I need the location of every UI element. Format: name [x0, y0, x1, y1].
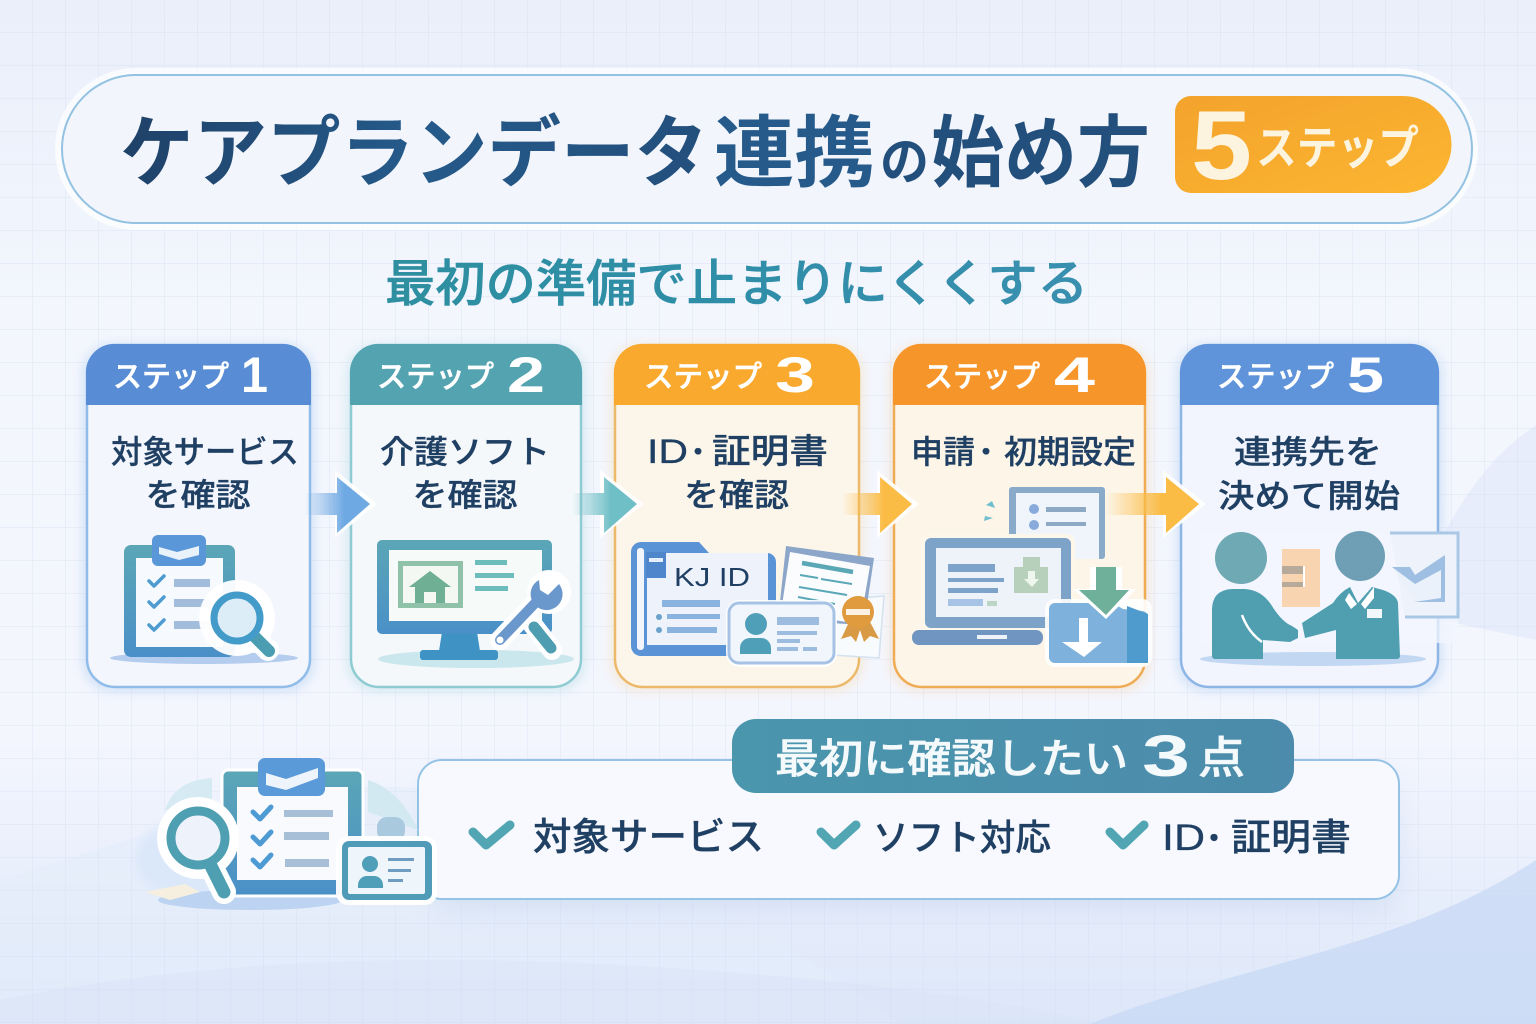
heading pill: 最初に確認したい — [775, 736, 1128, 782]
step 5 text: 決めて開始 — [1218, 478, 1400, 514]
step 1 text: 対象サービス — [111, 434, 299, 470]
icon: ID folder, documents and card — [631, 542, 884, 667]
step 1 label: ステップ — [113, 361, 229, 394]
header banner — [55, 68, 1478, 230]
step 5 label — [1217, 347, 1384, 403]
check item: ID and certificate: ・ — [1199, 823, 1229, 856]
step 4 label: ステップ — [924, 361, 1040, 394]
check item: ID and certificate — [1110, 817, 1351, 858]
step 4 text: 初期設定 — [1004, 434, 1136, 470]
step 3 label: 3 — [775, 347, 815, 403]
arrow: step 2 to 3 — [572, 470, 644, 538]
icon: monitor with wrench — [377, 540, 574, 668]
step 1 label: 1 — [241, 347, 268, 403]
badge: 5 steps: 5 — [1191, 90, 1252, 200]
step 4 text: ・ — [972, 437, 1000, 468]
step 2 text: を確認 — [412, 477, 518, 513]
panel: step 1 — [82, 344, 315, 692]
title: ケアプランデータ — [120, 109, 708, 197]
step 4 text — [911, 434, 1136, 470]
subtitle: 最初の準備で止まりにくくする — [385, 256, 1088, 312]
step 2 label: ステップ — [377, 361, 494, 394]
panel: step 5 — [1176, 344, 1458, 692]
step 3 text: 証明書 — [712, 433, 828, 471]
arrow: step 1 to 2 — [305, 470, 377, 538]
badge: 5 steps — [1175, 90, 1451, 200]
panel: step 4 — [889, 344, 1150, 692]
step 3 text: ID — [647, 433, 688, 471]
check item: ID and certificate: ID — [1162, 817, 1205, 858]
step 1 text: を確認 — [146, 477, 250, 513]
step 4 label: 4 — [1054, 347, 1095, 403]
icon: clipboard with magnifier — [110, 535, 298, 664]
badge: 5 steps: ステップ — [1256, 122, 1419, 174]
panel: step 2 — [346, 344, 586, 692]
step 3 text: を確認 — [684, 477, 789, 513]
step 2 text: 介護ソフト — [380, 434, 550, 470]
icon: handshake with document and mail — [1200, 531, 1458, 666]
heading pill: 点 — [1198, 734, 1245, 783]
step 4 label — [924, 347, 1095, 403]
title: 始め方 — [931, 109, 1150, 197]
heading pill: 3 — [1142, 724, 1190, 789]
heading pill — [732, 719, 1294, 793]
panel: step 3 — [610, 344, 884, 692]
arrow: step 3 to 4 — [842, 470, 919, 538]
step 5 label: ステップ — [1217, 361, 1334, 394]
title — [120, 109, 1150, 197]
step 2 label — [377, 347, 545, 403]
step 1 label — [113, 347, 268, 403]
step 3 text — [647, 433, 828, 513]
step 3 text: ・ — [684, 437, 712, 468]
icon: laptop with download — [912, 487, 1148, 663]
check item: ID and certificate: 証明書 — [1231, 817, 1351, 858]
step 4 text: 申請 — [911, 434, 975, 470]
step 2 label: 2 — [507, 347, 545, 403]
arrow: step 4 to 5 — [1106, 470, 1206, 538]
KJ ID label: KJ ID — [674, 562, 750, 592]
step 3 label — [644, 347, 815, 403]
panel: first three checks — [418, 719, 1399, 908]
title: 連携 — [714, 109, 875, 197]
check item: software support: ソフト対応 — [873, 817, 1051, 858]
step 5 label: 5 — [1347, 347, 1384, 403]
title: の — [880, 134, 929, 192]
check item: target service: 対象サービス — [533, 817, 764, 859]
step 5 text: 連携先を — [1234, 434, 1382, 470]
icon: clipboard, magnifier and ID card — [135, 758, 437, 910]
step 3 label: ステップ — [644, 361, 762, 394]
